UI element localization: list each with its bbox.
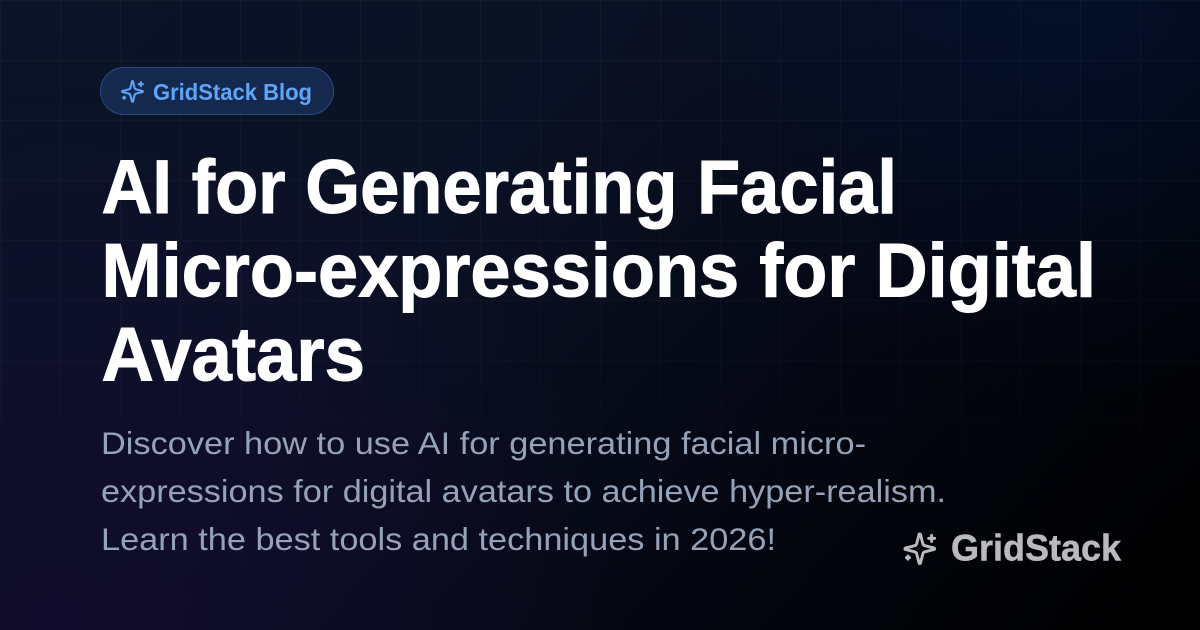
title: AI for Generating Facial <box>102 145 897 230</box>
icon: badge sparkle <box>122 81 143 102</box>
logo wordmark: GridStack <box>951 528 1121 568</box>
badge label: GridStack Blog <box>153 79 312 105</box>
description: Learn the best tools and techniques in 2026! <box>101 521 776 557</box>
badge: GridStack Blog <box>100 68 334 114</box>
title <box>102 145 1096 398</box>
description: Discover how to use AI for generating facial micro- <box>101 425 866 461</box>
icon: logo sparkle <box>905 534 935 564</box>
logo: GridStack <box>905 528 1121 568</box>
title: Avatars <box>102 312 365 398</box>
description: expressions for digital avatars to achieve hyper-realism. <box>101 473 946 509</box>
title: Micro-expressions for Digital <box>102 228 1096 314</box>
description <box>101 425 946 557</box>
